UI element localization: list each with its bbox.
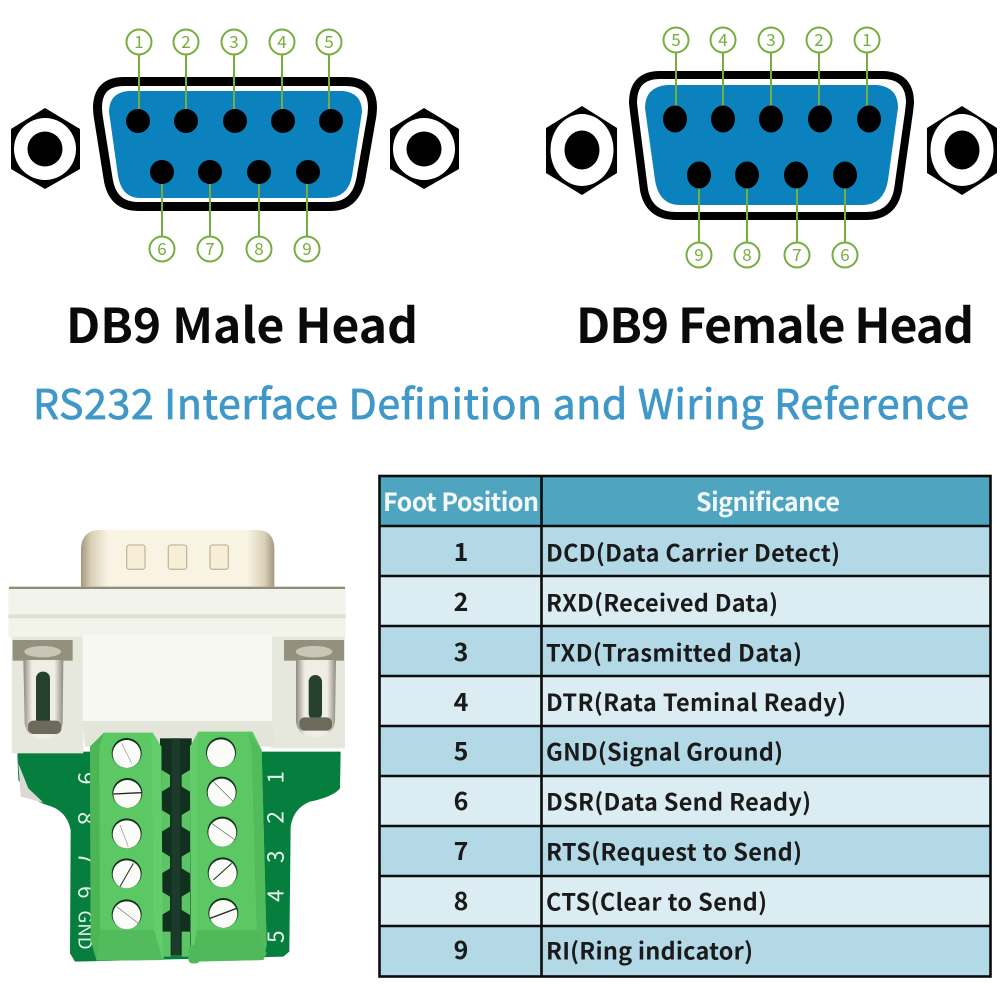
row 5: GND(Signal Ground): [546, 734, 783, 768]
right green terminal block: [190, 732, 267, 962]
male pins and numbered labels: 2: [181, 28, 191, 53]
row 8: CTS(Clear to Send): [546, 884, 767, 918]
silkscreen numbers right: 5: [258, 930, 291, 943]
DB9 female connector diagram: [546, 26, 997, 268]
male pins and numbered labels: 4: [277, 28, 287, 53]
title: RS232 Interface Definition and Wiring Reference: [33, 371, 969, 431]
row 4: [379, 676, 991, 726]
silkscreen numbers right: 2: [258, 811, 291, 824]
male pins and numbered labels: 7: [205, 235, 215, 260]
row 3: TXD(Trasmitted Data): [546, 634, 802, 668]
table header: Foot Position: [383, 483, 539, 519]
row 4: 4: [454, 683, 469, 719]
center gap of terminal: [160, 738, 192, 957]
white housing: [8, 587, 346, 753]
icon: male right hex nut: [390, 108, 459, 189]
metal D-shell with pins: [81, 530, 274, 588]
row 8: [379, 876, 991, 926]
row 1: DCD(Data Carrier Detect): [546, 534, 840, 568]
silkscreen numbers left: 6: [71, 886, 104, 899]
female connector shell: [633, 75, 910, 216]
left green terminal block: [90, 733, 164, 961]
heading: DB9 Female Head: DB9 Female Head: [576, 287, 974, 357]
row 7: 7: [454, 832, 468, 868]
table header: Significance: [696, 483, 840, 519]
row 1: 1: [454, 533, 468, 569]
row 3: 3: [454, 633, 468, 669]
terminal screws: [112, 737, 238, 929]
icon: male left hex nut: [11, 108, 80, 189]
male pins and numbered labels: 6: [157, 235, 167, 260]
icon: female right hex nut: [927, 106, 997, 195]
male pins and numbered labels: 9: [302, 235, 312, 260]
male pins and numbered labels: 1: [134, 28, 144, 53]
icon: female left hex nut: [546, 106, 617, 195]
screw slots: [113, 743, 237, 923]
silkscreen numbers left: 7: [71, 852, 104, 865]
female sockets and numbered labels: 3: [766, 26, 776, 51]
female sockets and numbered labels: 5: [671, 26, 681, 51]
male connector shell: [98, 82, 372, 206]
latch tab: [188, 945, 200, 963]
male pins and numbered labels: [126, 28, 343, 262]
row 5: 5: [454, 732, 468, 768]
row 9: 9: [454, 931, 468, 967]
row 9: [379, 926, 991, 976]
right metal bracket: [284, 640, 344, 737]
photo: DB9 male screw terminal adapter: [8, 530, 346, 963]
female sockets and numbered labels: 9: [694, 241, 704, 266]
silkscreen numbers left: GND: [72, 910, 99, 950]
DB9 male connector diagram: [11, 28, 459, 262]
silkscreen numbers left: [71, 772, 104, 950]
female connector blue face: [645, 85, 898, 205]
female sockets and numbered labels: [663, 26, 881, 268]
silkscreen numbers left: 8: [71, 812, 104, 825]
row 9: RI(Ring indicator): [546, 932, 753, 966]
silkscreen numbers right: 4: [258, 889, 291, 902]
male pins and numbered labels: 3: [229, 28, 239, 53]
silkscreen numbers right: [258, 771, 291, 943]
table header: [379, 476, 991, 526]
female sockets and numbered labels: 8: [742, 241, 752, 266]
left metal bracket: [13, 640, 73, 739]
silkscreen numbers right: 3: [258, 850, 291, 863]
row 7: [379, 826, 991, 876]
female sockets and numbered labels: 2: [814, 26, 824, 51]
pin definition table: [379, 476, 991, 976]
row 7: RTS(Request to Send): [546, 834, 802, 868]
row 1: [379, 526, 991, 576]
row 2: RXD(Received Data): [546, 584, 778, 618]
male pins and numbered labels: 5: [324, 28, 334, 53]
silkscreen numbers right: 1: [258, 771, 291, 784]
PCB board: [17, 752, 341, 962]
male pins and numbered labels: 8: [254, 235, 264, 260]
row 3: [379, 626, 991, 676]
silkscreen numbers left: 9: [71, 772, 104, 785]
female sockets and numbered labels: 1: [862, 26, 872, 51]
row 4: DTR(Rata Teminal Ready): [546, 684, 846, 718]
female sockets and numbered labels: 7: [792, 241, 802, 266]
row 8: 8: [454, 882, 468, 918]
row 5: [379, 726, 991, 776]
female sockets and numbered labels: 4: [718, 26, 728, 51]
heading: DB9 Male Head: DB9 Male Head: [66, 287, 418, 357]
female sockets and numbered labels: 6: [840, 241, 850, 266]
mounting screw tab: [18, 763, 43, 803]
table grid lines: [379, 476, 991, 976]
row 6: 6: [454, 782, 468, 818]
row 2: 2: [454, 583, 468, 619]
male connector blue face: [109, 91, 362, 198]
row 6: DSR(Data Send Ready): [546, 784, 811, 818]
row 2: [379, 576, 991, 626]
row 6: [379, 776, 991, 826]
